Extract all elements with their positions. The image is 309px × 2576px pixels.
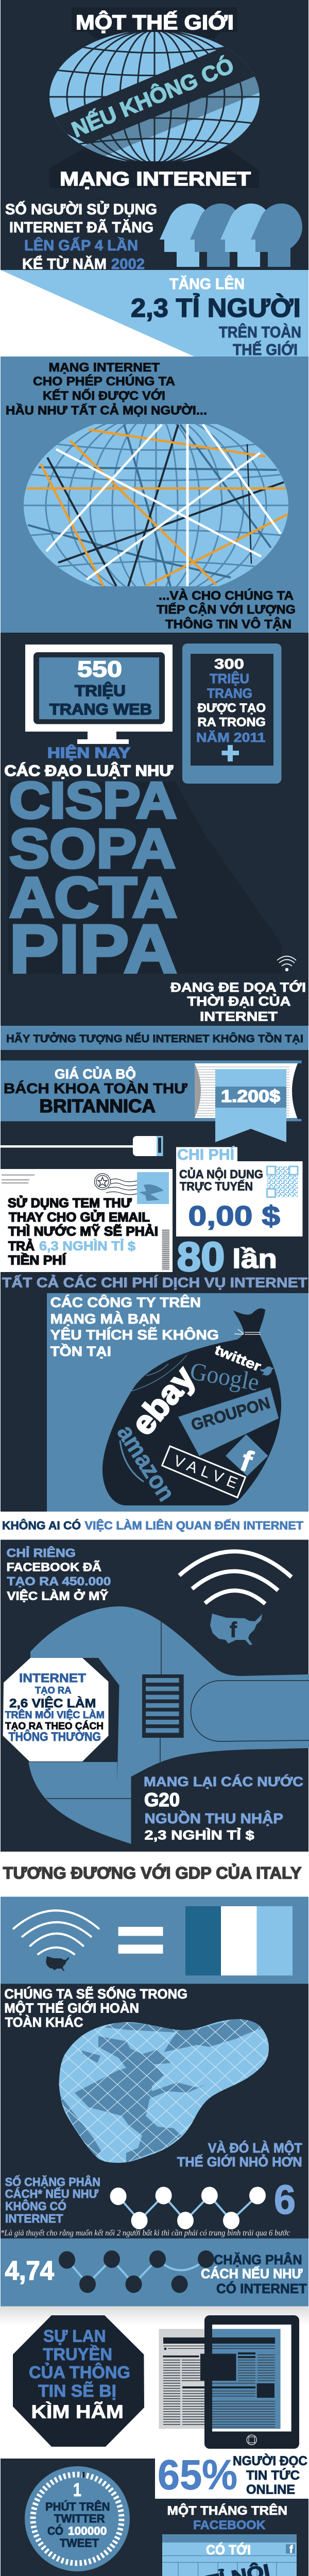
text: degrees without internet: INTERNET — [5, 2212, 63, 2225]
icon: world map blob — [57, 2017, 270, 2164]
icon: trash bag of brands: VALVE — [171, 1452, 240, 1492]
icon: monitor with 550 million: 550 — [77, 656, 122, 682]
text: G20 income: G20 — [144, 1789, 180, 1810]
panel: degrees with internet: CÓ INTERNET — [216, 2281, 307, 2296]
text: CISPA SOPA ACTA PIPA: PIPA — [9, 911, 177, 987]
text: CISPA SOPA ACTA PIPA — [9, 772, 177, 987]
text: G20 income: 2,3 NGHÌN TỈ $ — [144, 1827, 254, 1843]
heading: equal to Italy GDP — [0, 1852, 309, 1897]
icon: trash bag of brands: GROUPON — [189, 1393, 272, 1434]
text: 80 times: 80 — [177, 1233, 225, 1280]
icon: tablet with 300 million: 300 — [214, 656, 244, 672]
text: smaller world — [177, 2140, 302, 2170]
icon: USA map with f — [210, 1614, 262, 1645]
text: users grew — [5, 200, 157, 273]
panel: clock twitter: CÓ — [47, 2524, 63, 2537]
panel: title and globe — [1, 0, 308, 273]
panel: degrees with internet: CÁCH NẾU NHƯ — [201, 2266, 303, 2281]
panel: online companies — [1, 1293, 308, 1512]
text: endless information — [157, 588, 296, 632]
icon: monitor with 550 million: TRANG WEB — [49, 700, 152, 718]
text: G20 income: NGUỒN THU NHẬP — [144, 1810, 283, 1826]
callout: octagon 2.6 jobs: THÔNG THƯỜNG — [8, 1730, 101, 1744]
icon: white chain of nodes — [110, 2187, 266, 2229]
text: users grew: LÊN GẤP 4 LẦN — [24, 236, 138, 254]
icon: dark chain of nodes — [59, 2250, 214, 2293]
panel: clock twitter: TWITTER — [54, 2512, 105, 2525]
panel: 2.3 billion people — [1, 270, 308, 359]
text: CISPA SOPA ACTA PIPA: CISPA — [9, 772, 177, 828]
callout: octagon 2.6 jobs: TẠO RA THEO CÁCH — [5, 1720, 104, 1732]
text: companies: TỒN TẠI — [50, 1343, 111, 1359]
text: threatens: ĐANG ĐE DỌA TỚI — [170, 979, 306, 995]
heading band: imagine — [1, 1026, 308, 1050]
text: different world: CHÚNG TA SẼ SỐNG TRONG — [4, 1986, 187, 2002]
panel: clock twitter: PHÚT TRÊN — [45, 2500, 110, 2513]
text: threatens: INTERNET — [200, 1010, 278, 1024]
text: degrees without internet — [5, 2175, 100, 2225]
callout: stop octagon: CỦA THÔNG — [29, 2362, 130, 2382]
callout: octagon 2.6 jobs — [3, 1658, 109, 1761]
text: postage cost: TRẢ — [8, 1238, 35, 1253]
panel: smaller world — [1, 1984, 308, 2239]
icon: QR code — [267, 1166, 298, 1197]
number 6: 6 — [274, 2177, 296, 2223]
callout: stop octagon: KÌM HÃM — [31, 2401, 124, 2422]
panel: cost of online content: TRỰC TUYẾN — [180, 1179, 253, 1193]
icon: calendar — [162, 2534, 297, 2576]
text: smaller world: THẾ GIỚI NHỎ HƠN — [177, 2154, 302, 2170]
panel: 2.3 billion people: 2,3 TỈ NGƯỜI — [131, 293, 301, 323]
text: laws intro — [4, 744, 173, 779]
text: postage cost: SỬ DỤNG TEM THƯ — [8, 1195, 132, 1211]
text: different world: TOÀN KHÁC — [5, 2014, 83, 2030]
icon: Italy flag — [185, 1906, 293, 1975]
text: degrees without internet: KHÔNG CÓ — [5, 2199, 66, 2213]
text: cost of britannica: BÁCH KHOA TOÀN THƯ — [4, 1080, 187, 1096]
icon: calendar: CÓ TỚI — [206, 2542, 251, 2557]
text: smaller world: VÀ ĐÓ LÀ MỘT — [208, 2140, 302, 2156]
barcode — [162, 1229, 169, 1270]
callout: stop octagon: TIN SẼ BỊ — [38, 2381, 116, 2400]
text: users grew: KỂ TỪ NĂM — [22, 255, 107, 273]
panel: 2.3 billion people: THẾ GIỚI — [233, 340, 298, 359]
text: 80 times — [177, 1233, 277, 1280]
icon: tablet with 300 million: TRANG — [207, 685, 252, 701]
icon: networked globe — [24, 424, 288, 586]
icon: four heads — [160, 204, 302, 267]
text: different world: MỘT THẾ GIỚI HOÀN — [4, 2001, 139, 2016]
panel: jobs — [1, 1540, 309, 1852]
text: CISPA SOPA ACTA PIPA: SOPA — [9, 817, 176, 879]
panel: envelope postage — [1, 1169, 173, 1272]
icon: equals sign — [118, 1927, 163, 1954]
text: 80 times: lần — [232, 1244, 277, 1274]
panel: 2.3 billion people: TRÊN TOÀN — [219, 323, 301, 341]
text: facebook jobs: TẠO RA 450.000 — [7, 1574, 111, 1588]
text: companies — [50, 1294, 219, 1359]
callout: octagon 2.6 jobs: 2,6 VIỆC LÀM — [9, 1696, 96, 1710]
heading band: no internet jobs — [0, 1512, 309, 1540]
icon: monitor with 550 million — [25, 645, 173, 744]
panel: 2.3 billion people: TĂNG LÊN — [169, 275, 245, 293]
text: connects us: MẠNG INTERNET — [48, 361, 160, 375]
text: companies: YÊU THÍCH SẼ KHÔNG — [50, 1327, 219, 1343]
text: facebook jobs: CHỈ RIÊNG — [7, 1545, 76, 1560]
panel: equals Italy flag — [1, 1897, 308, 1984]
text: endless information: THÔNG TIN VÔ TẬN — [165, 617, 291, 632]
callout: octagon 2.6 jobs: INTERNET — [19, 1671, 86, 1685]
title line 1: MỘT THẾ GIỚI — [76, 10, 234, 34]
title line 2: rotated: NẾU KHÔNG CÓ — [68, 53, 237, 142]
text: postage cost — [8, 1195, 158, 1267]
panel: clock twitter: 1 — [73, 2479, 81, 2500]
text: connects us: KẾT NỐI ĐƯỢC VỚI — [43, 388, 165, 403]
icon: trash bag of brands — [102, 1309, 281, 1506]
heading band: no internet jobs: VIỆC LÀM LIÊN QUAN ĐẾN INTERNET — [84, 1519, 304, 1532]
panel: facebook month: MỘT THÁNG TRÊN — [167, 2503, 287, 2518]
text: endless information: TIẾP CẬN VỚI LƯỢNG — [157, 602, 296, 617]
footnote: *Là giả thuyết cho rằng muốn kết nối 2 người bất kì thì cần phải có trung bình trải qua 6 bước — [1, 2229, 290, 2238]
panel: cost of online content: CỦA NỘI DUNG — [179, 1166, 263, 1181]
icon: tablet with 300 million — [182, 643, 281, 784]
text: facebook jobs: VIỆC LÀM Ở MỸ — [7, 1588, 108, 1603]
text: companies: MẠNG MÀ BẠN — [50, 1311, 160, 1327]
panel: web pages and laws — [1, 633, 308, 1026]
panel: britannica — [1, 1060, 302, 1142]
address lines — [2, 1175, 35, 1183]
text: facebook jobs: FACEBOOK ĐÃ — [7, 1560, 101, 1574]
callout: octagon 2.6 jobs: TẠO RA — [35, 1685, 71, 1696]
panel: degrees with internet — [1, 2239, 308, 2307]
text: users grew: INTERNET ĐÃ TĂNG — [9, 218, 153, 236]
panel: internet connects everyone — [1, 357, 308, 633]
panel: clock twitter: TWEET — [60, 2537, 99, 2550]
heading: equal to Italy GDP: TƯƠNG ĐƯƠNG VỚI GDP CỦA ITALY — [3, 1863, 301, 1882]
icon: USA map with f: f — [230, 1618, 237, 1642]
icon: wifi over USA — [13, 1910, 99, 1971]
icon: clock — [25, 2466, 130, 2571]
text: degrees without internet: SỐ CHẶNG PHÂN — [5, 2175, 100, 2189]
icon: tablet with 300 million: ĐƯỢC TẠO — [198, 701, 266, 715]
icon: stamp with eagle — [137, 1172, 169, 1204]
icon: tablet with 300 million: NĂM 2011 — [196, 730, 266, 745]
text: postage cost: THÌ NƯỚC MỸ SẼ PHẢI — [8, 1224, 158, 1239]
text: postage cost: THAY CHO GỬI EMAIL — [9, 1209, 150, 1225]
text: facebook jobs — [7, 1545, 111, 1603]
icon: trash bag of brands: amazon — [112, 1420, 180, 1506]
text: users grew: SỐ NGƯỜI SỬ DỤNG — [5, 200, 157, 218]
icon: mouse cable — [1, 1136, 163, 1156]
text: 65 percent read news online: 65% — [158, 2451, 237, 2498]
icon: wrench shape — [29, 1606, 309, 1844]
text: degrees without internet: CÁCH* NẾU NHƯ — [5, 2187, 99, 2200]
panel: clock twitter: 100000 — [68, 2524, 107, 2537]
panel: clock twitter — [1, 2459, 155, 2576]
icon: tablet with 300 million: RA TRONG — [198, 716, 266, 730]
icon: tablet with 300 million: TRIỆU — [210, 671, 249, 686]
text: cost of britannica: BRITANNICA — [39, 1095, 156, 1116]
heading band: no internet jobs: KHÔNG AI CÓ — [2, 1519, 81, 1532]
title line 3: MẠNG INTERNET — [60, 168, 251, 190]
icon: monitor with 550 million: TRIỆU — [75, 681, 126, 700]
icon: sliced globe — [49, 32, 260, 161]
panel: degrees with internet: 4,74 — [5, 2256, 54, 2286]
icon: newspaper on tablet — [159, 2315, 299, 2449]
callout: octagon 2.6 jobs: TRÊN MỖI VIỆC LÀM — [5, 1709, 105, 1721]
text: postage cost: 6,3 NGHÌN TỈ $ — [39, 1238, 135, 1253]
text: connects us: CHO PHÉP CHÚNG TA — [33, 374, 175, 388]
text: 65 percent read news online: NGƯỜI ĐỌC — [233, 2453, 307, 2468]
panel: information spread — [0, 2307, 309, 2499]
text: laws intro: HIỆN NAY — [47, 744, 130, 761]
title band top — [72, 7, 237, 39]
text: threatens — [170, 979, 306, 1024]
text: users grew: 2002 — [111, 256, 145, 273]
icon: trash bag of brands: ebay — [124, 1359, 202, 1442]
panel: facebook month — [155, 2499, 308, 2576]
icon: big wifi — [179, 1551, 291, 1604]
text: 65 percent read news online: ONLINE — [246, 2483, 295, 2497]
panel: cost of online content — [176, 1146, 303, 1236]
text: CISPA SOPA ACTA PIPA: ACTA — [9, 866, 177, 929]
callout: stop octagon — [13, 2315, 144, 2447]
icon: postmark — [95, 1174, 137, 1195]
icon: book: 1.200$ — [221, 1087, 280, 1106]
panel: degrees with internet: CHẶNG PHÂN — [214, 2252, 302, 2267]
icon: book — [195, 1063, 302, 1142]
icon: calendar: f — [289, 2544, 293, 2555]
text: connects us — [6, 361, 207, 417]
panel: facebook month: FACEBOOK — [193, 2518, 266, 2532]
icon: small wifi — [277, 956, 296, 971]
text: threatens: THỜI ĐẠI CỦA — [187, 993, 290, 1009]
panel: cost of online content: 0,00 $ — [188, 1201, 280, 1232]
icon: trash bag of brands: Google — [188, 1358, 261, 1396]
text: 65 percent read news online — [158, 2451, 307, 2498]
text: endless information: ...VÀ CHO CHÚNG TA — [159, 588, 294, 603]
text: cost of britannica — [4, 1065, 187, 1116]
title band bottom — [49, 147, 259, 188]
text: cost of britannica: GIÁ CỦA BỘ — [55, 1065, 136, 1082]
text: connects us: HẦU NHƯ TẤT CẢ MỌI NGƯỜI... — [6, 403, 207, 417]
callout: stop octagon: TRUYỀN — [43, 2345, 112, 2364]
panel: costs background — [1, 1050, 308, 1293]
text: all internet service fees: TẤT CẢ CÁC CHI PHÍ DỊCH VỤ INTERNET — [2, 1274, 308, 1290]
callout: stop octagon: SỰ LAN — [43, 2327, 106, 2346]
text: 65 percent read news online: TIN TỨC — [246, 2467, 300, 2483]
icon: trash bag of brands: f — [236, 1444, 257, 1479]
text: companies: CÁC CÔNG TY TRÊN — [50, 1294, 201, 1310]
text: different world — [4, 1986, 187, 2030]
text: G20 income — [144, 1774, 303, 1843]
text: laws intro: CÁC ĐẠO LUẬT NHƯ — [4, 762, 173, 779]
text: G20 income: MANG LẠI CÁC NƯỚC — [144, 1774, 303, 1789]
heading band: imagine: HÃY TƯỞNG TƯỢNG NẾU INTERNET KHÔNG TỒN TẠI — [6, 1032, 303, 1045]
panel: cost of online content: CHI PHÍ — [177, 1146, 235, 1163]
text: postage cost: TIỀN PHÍ — [8, 1253, 66, 1267]
icon: trash bag of brands: twitter — [213, 1342, 264, 1375]
